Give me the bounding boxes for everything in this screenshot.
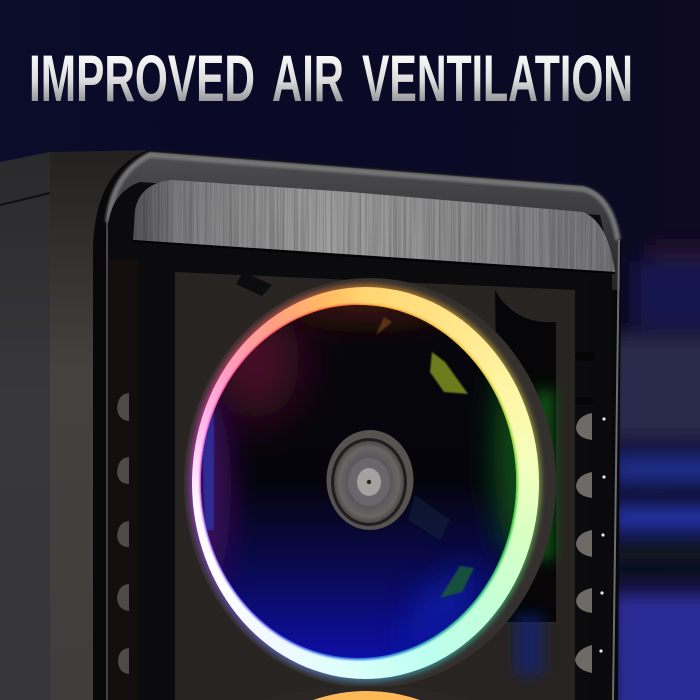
case side panel (0, 152, 50, 700)
fan interior and hub (201, 305, 516, 658)
second fan LED ring (313, 691, 420, 700)
ring glow (189, 284, 541, 682)
left frame highlight (106, 215, 108, 700)
fan interior (201, 305, 516, 658)
case corner column (50, 150, 150, 700)
plate shadow line (133, 241, 615, 273)
title (29, 41, 633, 115)
band highlight (108, 155, 618, 240)
blue sliver left (201, 400, 214, 530)
right inner black panel (495, 290, 556, 622)
black frame edge (93, 150, 621, 700)
left vent tabs (117, 393, 129, 674)
fan frame (175, 272, 575, 700)
green tint right (479, 378, 516, 560)
title: IMPROVED (29, 41, 255, 115)
right vent slots (575, 352, 595, 405)
blade highlight orange (376, 317, 392, 335)
right dark strip (590, 275, 612, 700)
left interior reddish tint (109, 260, 139, 700)
top left corner gap (236, 272, 272, 296)
blue glow below panel (515, 615, 543, 675)
right vent tabs (575, 413, 592, 673)
blade highlight dark blue (408, 495, 450, 540)
blade highlight yellow (430, 352, 468, 394)
blue reflection lower right (400, 560, 480, 650)
window recess (108, 182, 612, 700)
green glow on panel (536, 390, 554, 560)
case photo: background and case body (0, 150, 700, 700)
blurred background lights (610, 245, 700, 700)
top metal band (107, 152, 620, 290)
red tint top left (210, 300, 300, 420)
blade highlight green (440, 566, 474, 598)
title: AIR (272, 41, 344, 115)
ring inner saturated edge (200, 304, 518, 660)
right frame highlight (613, 240, 619, 700)
brushed metal plate (130, 175, 620, 275)
LED ring (192, 287, 539, 679)
orange tint top (298, 305, 436, 338)
ring surround (184, 278, 556, 688)
fan hub (326, 430, 414, 530)
right vent lights (599, 417, 606, 653)
second fan surround (262, 686, 470, 700)
panel seam (0, 193, 50, 205)
purple tint left (201, 390, 248, 581)
